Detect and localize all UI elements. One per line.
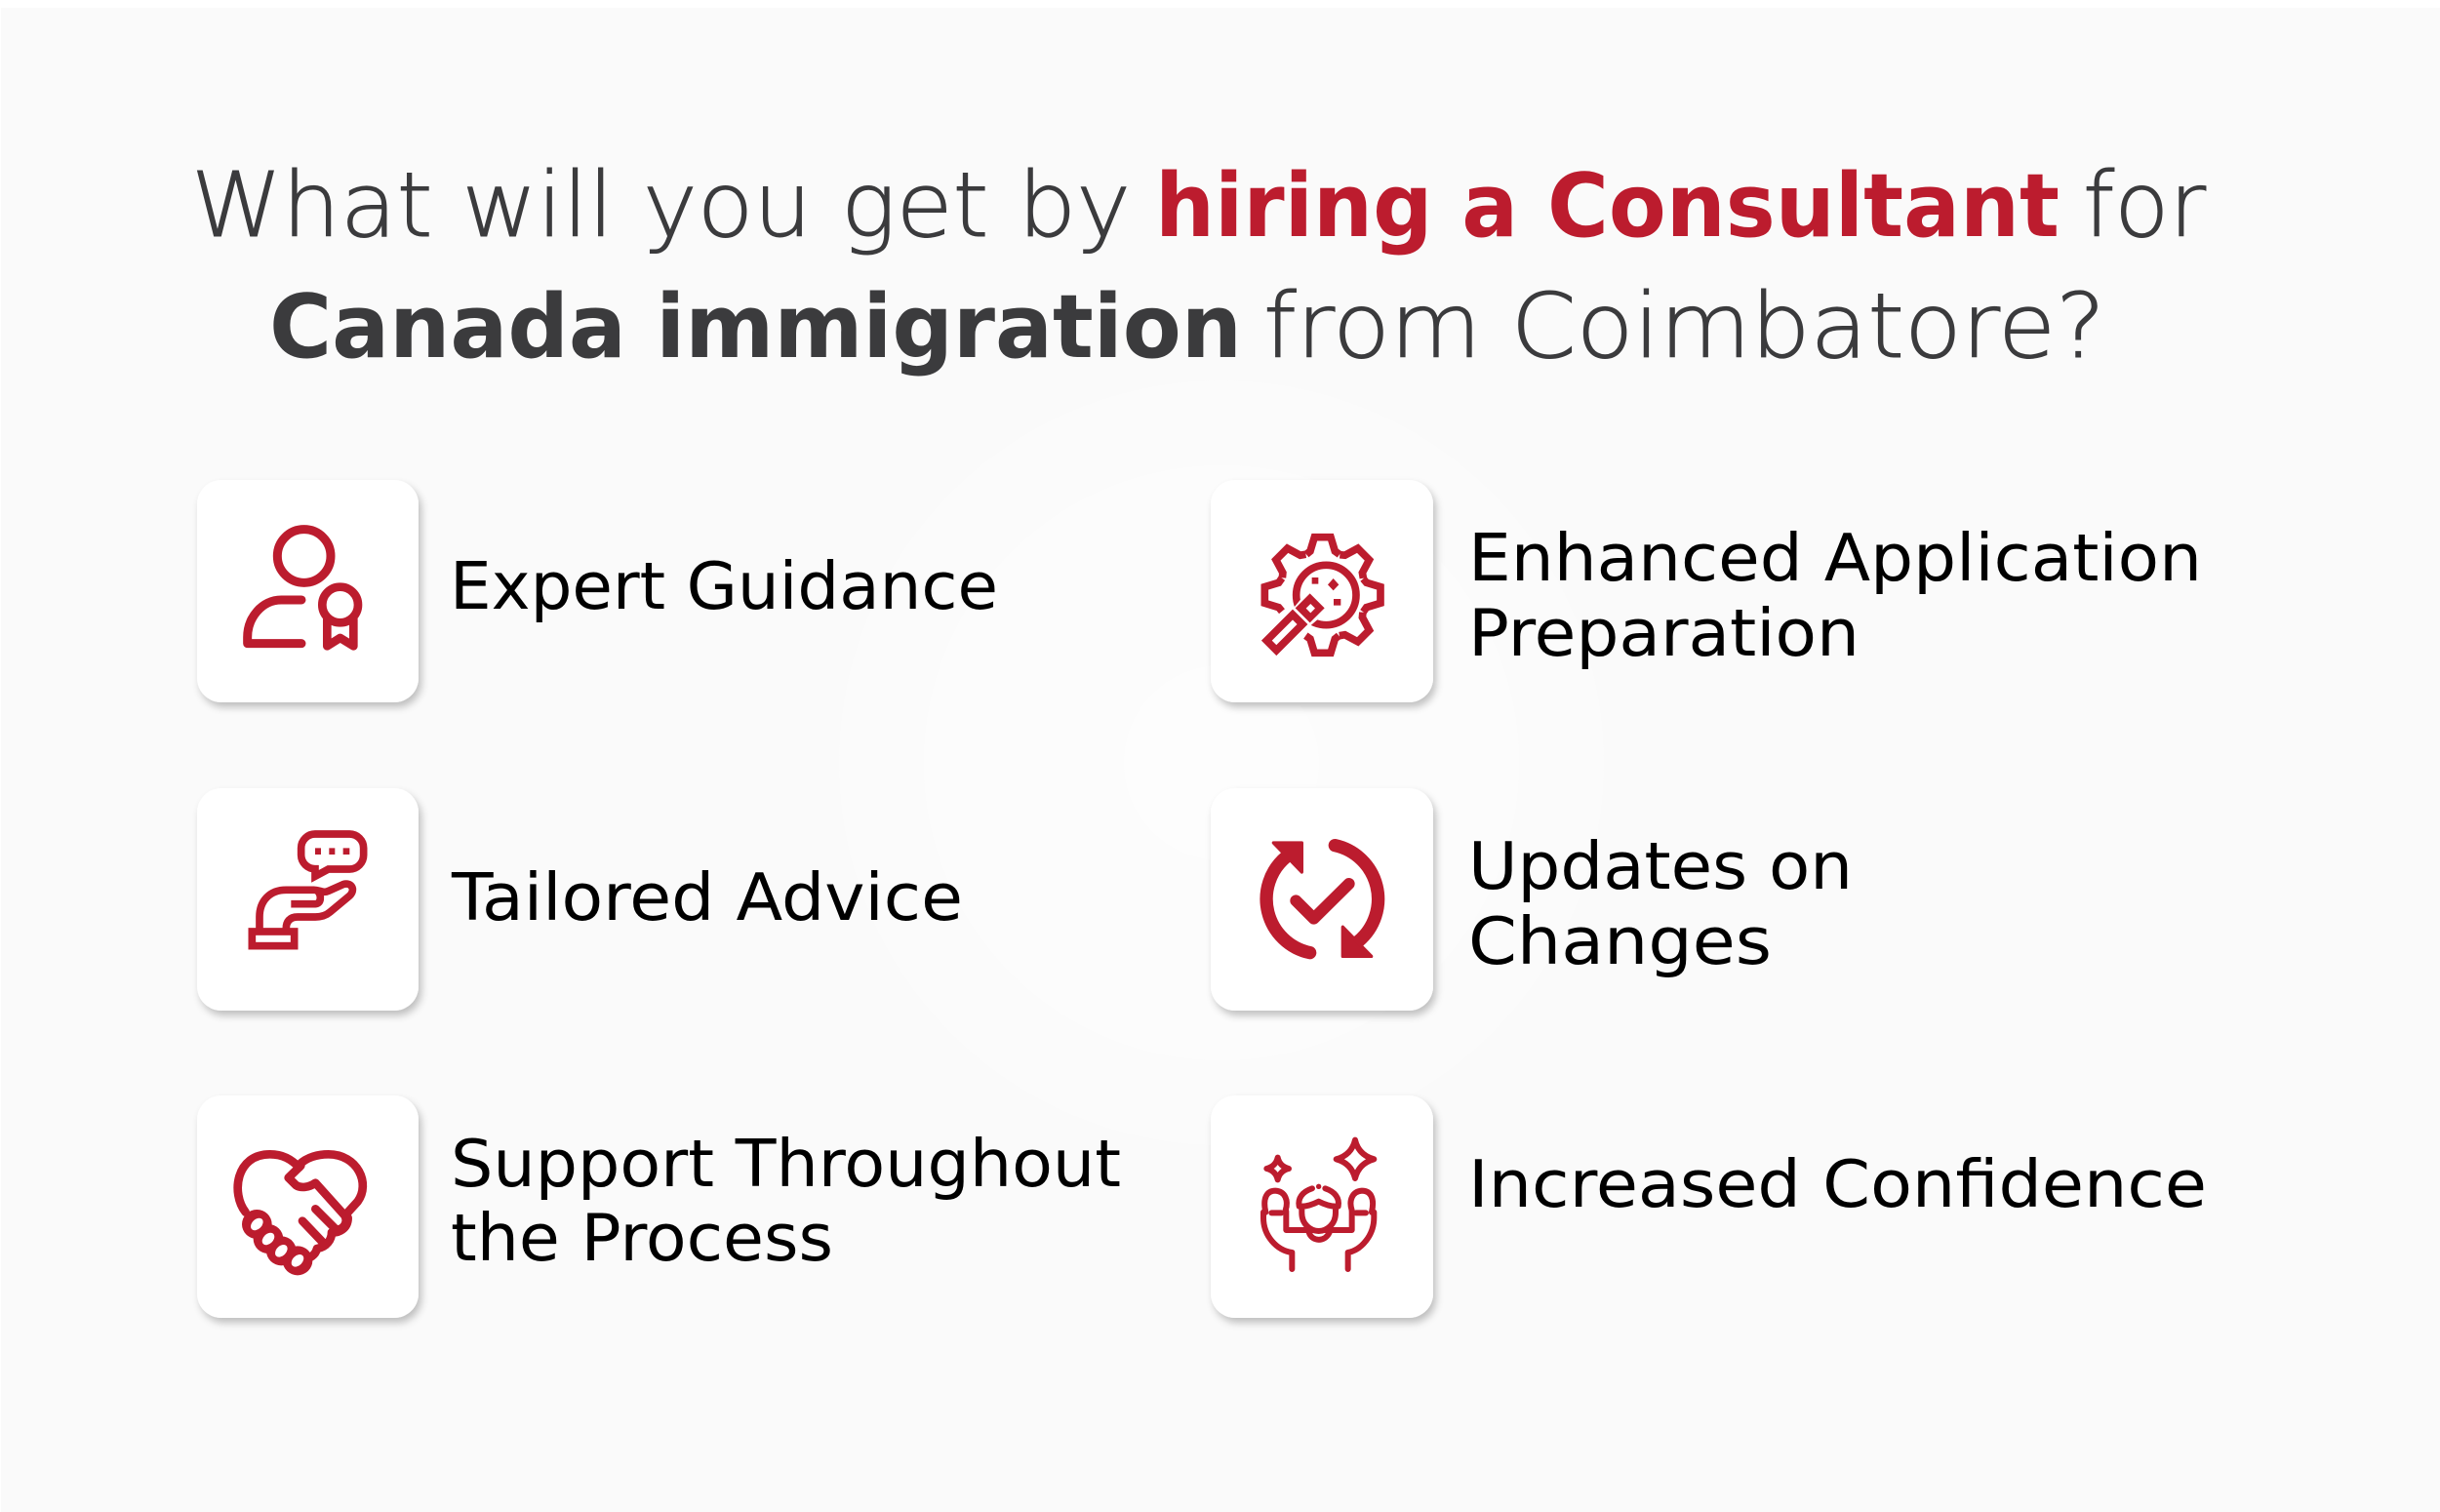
label: Tailored Advice: Tailored Advice bbox=[451, 859, 963, 935]
panel: Updates on Changes bbox=[1211, 788, 1853, 1011]
label: Enhanced Application Preparation: Enhanced Application bbox=[1468, 520, 2202, 596]
icon: hand with speech bubble bbox=[252, 834, 364, 946]
panel: Increased Confidence bbox=[1211, 1095, 2207, 1318]
title: Canada immigration bbox=[269, 276, 1242, 378]
label: Expert Guidance: Expert Guidance bbox=[450, 548, 998, 624]
panel: Tailored Advice bbox=[197, 788, 963, 1011]
panel: Support Throughout the Process bbox=[197, 1095, 1121, 1318]
icon: expert person with ribbon badge bbox=[248, 530, 358, 646]
label: Enhanced Application Preparation: Preparation bbox=[1468, 595, 1860, 671]
title bbox=[191, 153, 2206, 378]
title: hiring a Consultant bbox=[1155, 155, 2060, 258]
label: Increased Confidence: Increased Confidence bbox=[1468, 1146, 2207, 1222]
panel: Enhanced Application Preparation bbox=[1211, 480, 2202, 702]
icon: refresh arrows with check mark bbox=[1266, 843, 1379, 956]
label: Support Throughout the Process: Support Throughout bbox=[451, 1126, 1121, 1202]
icon: celebrating people with sparkles bbox=[1263, 1140, 1374, 1269]
icon: heart handshake bbox=[238, 1154, 363, 1275]
title: from Coimbatore? bbox=[1263, 274, 2105, 378]
icon: gear with magic wand bbox=[1264, 537, 1380, 653]
label: Support Throughout the Process: the Process bbox=[451, 1200, 833, 1276]
title: What will you get by bbox=[191, 153, 1131, 258]
label: Updates on Changes: Updates on bbox=[1468, 828, 1853, 904]
title: for bbox=[2083, 153, 2206, 258]
panel: Expert Guidance bbox=[197, 480, 998, 702]
label: Updates on Changes: Changes bbox=[1468, 903, 1772, 979]
